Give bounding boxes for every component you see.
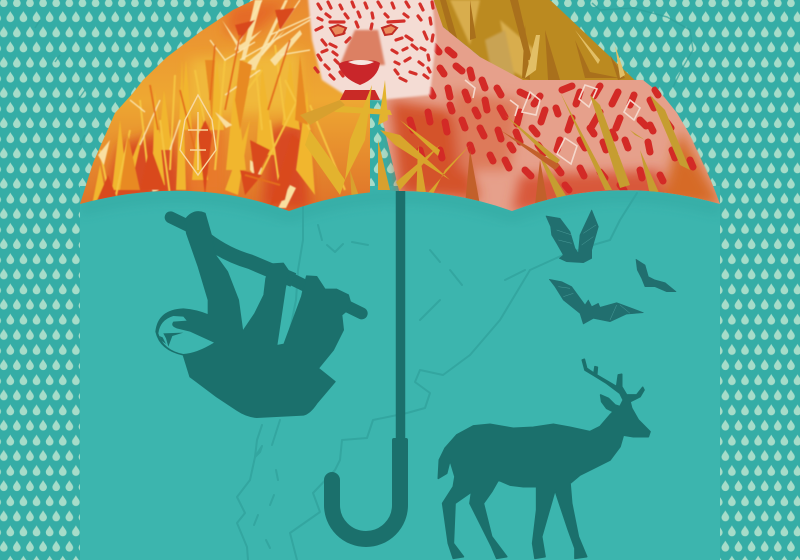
umbrella handle bbox=[332, 191, 408, 539]
jaguar body bbox=[380, 0, 722, 212]
deer silhouette bbox=[438, 359, 650, 558]
grass details group bbox=[92, 0, 345, 208]
bat 1 bbox=[546, 210, 598, 263]
grass blades cream bbox=[98, 0, 302, 208]
umbrella canopy with jaguar photo bbox=[70, 0, 722, 223]
grass blades yellow bbox=[92, 60, 315, 205]
foreground grass at chin bbox=[305, 80, 392, 195]
olive grass stems bbox=[440, 0, 625, 80]
warm color patches bbox=[100, 0, 310, 210]
top right olive background bbox=[430, 0, 640, 85]
branch bbox=[171, 217, 362, 313]
bat 3 bbox=[636, 259, 676, 292]
sloth silhouette bbox=[156, 212, 362, 417]
grass background left bbox=[70, 0, 370, 223]
chin bbox=[340, 90, 380, 100]
panel: under-umbrella area bbox=[80, 186, 720, 560]
jaguar face bbox=[308, 0, 436, 100]
bat 2 bbox=[549, 279, 643, 324]
grass blades orange and red bbox=[95, 8, 300, 205]
jaguar eyes bbox=[330, 25, 397, 36]
body bbox=[156, 212, 352, 417]
grass over jaguar bbox=[505, 92, 690, 205]
thin yellow stems bbox=[100, 45, 345, 200]
jaguar mouth bbox=[338, 60, 380, 85]
kaleidoscope center motif bbox=[180, 95, 216, 175]
sloth face bbox=[158, 316, 214, 354]
branch middle bbox=[207, 240, 293, 280]
jaguar spots bbox=[410, 26, 693, 190]
jaguar nose bbox=[340, 30, 385, 65]
face markings bbox=[315, 2, 433, 81]
map outline of South America bbox=[237, 193, 637, 560]
